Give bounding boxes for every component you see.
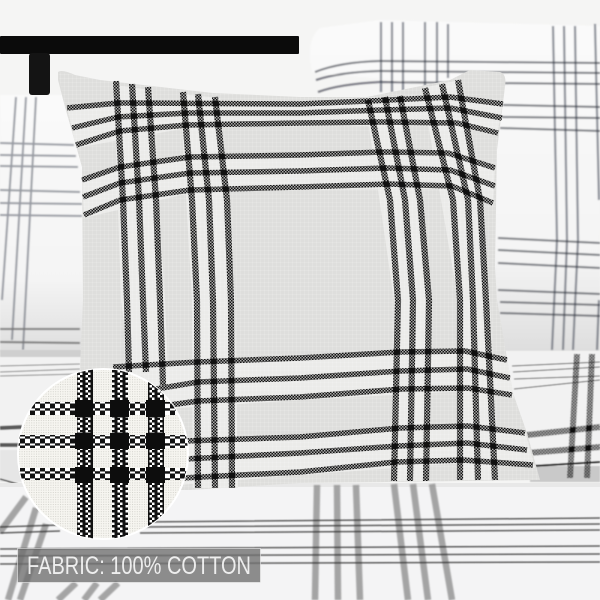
back pillow left — [0, 95, 90, 352]
main pillow — [58, 70, 540, 490]
linen weave — [58, 70, 540, 490]
magnified horizontal stripes — [18, 402, 190, 480]
blanket horizontal stripes — [0, 518, 600, 564]
horizontal plaid stripes — [67, 97, 533, 478]
blanket vertical stripes — [0, 484, 452, 600]
fabric label: FABRIC: 100% COTTON — [27, 552, 251, 580]
fabric label — [18, 548, 260, 582]
fabric detail magnifier circle — [18, 368, 190, 540]
curtain rod — [0, 36, 299, 95]
vertical plaid stripes — [116, 80, 495, 488]
side bedding right — [505, 352, 600, 482]
bottom blanket — [0, 483, 600, 600]
magnified black crossings — [75, 400, 165, 483]
pillow body — [58, 70, 540, 490]
lighter plaid bands — [67, 80, 535, 490]
magnified vertical stripes — [77, 368, 164, 540]
back pillow right — [310, 20, 600, 351]
side bedding left — [0, 350, 100, 484]
